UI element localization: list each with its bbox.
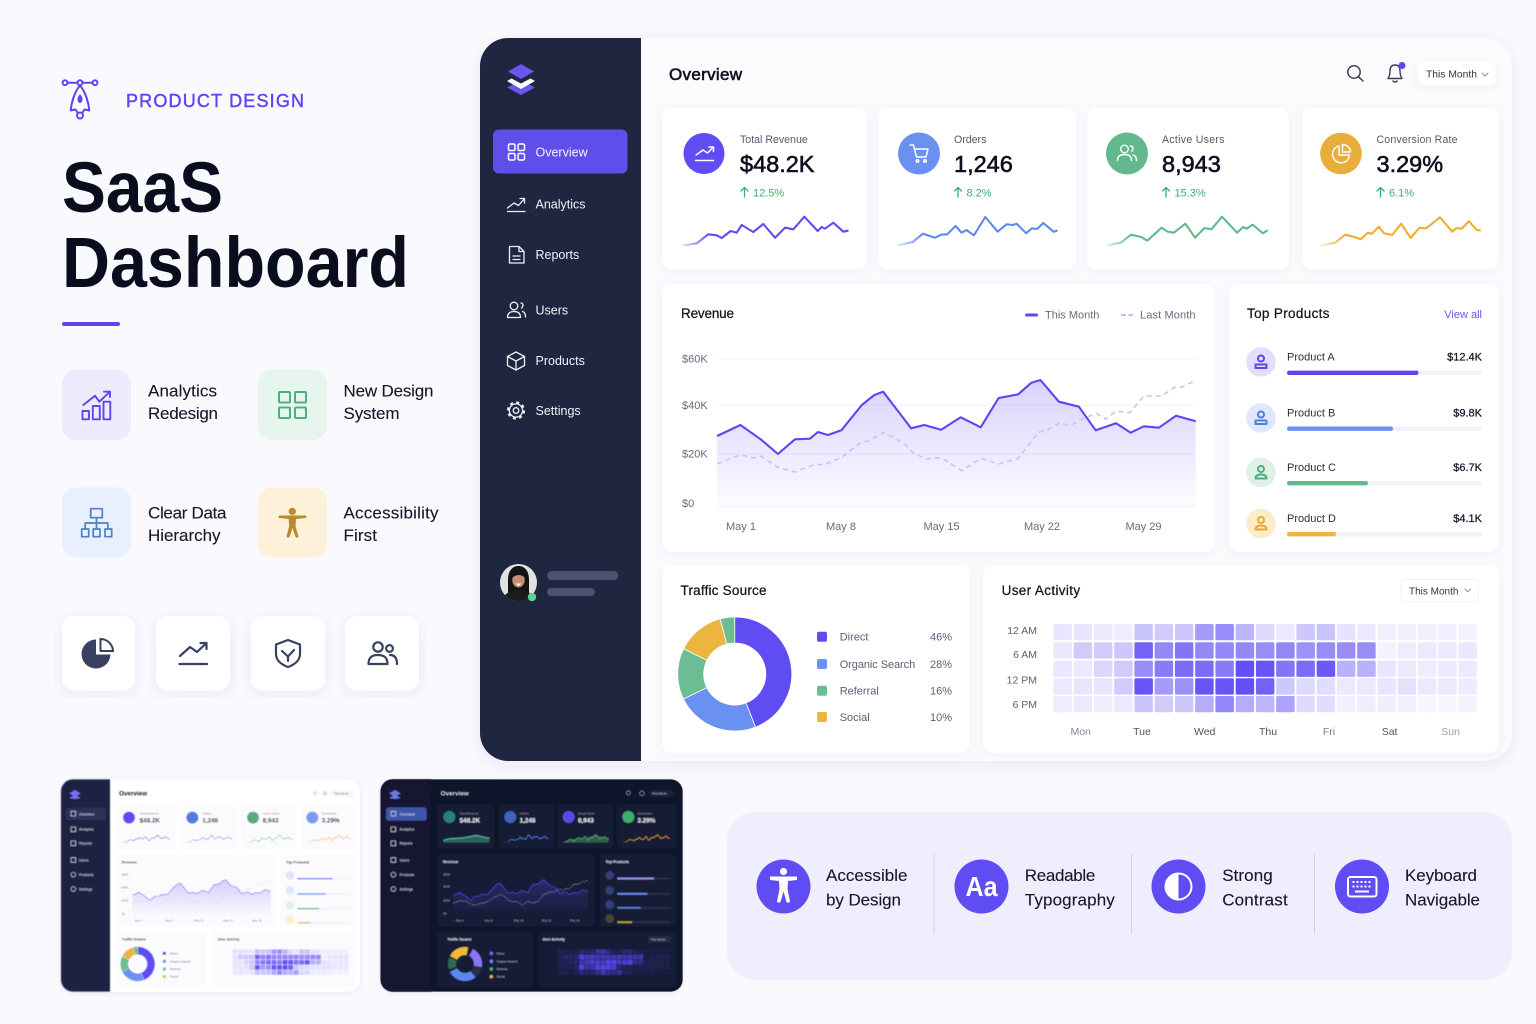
preview: dark theme dashboard: Top Products <box>606 860 629 864</box>
preview: dark theme dashboard: Organic Search <box>497 959 518 963</box>
x axis labels: May 29 <box>1125 521 1162 533</box>
preview: dark theme dashboard: $48.2K <box>460 818 481 825</box>
preview: dark theme dashboard: Products <box>400 873 414 877</box>
preview: dark theme dashboard: $20K <box>443 898 450 902</box>
preview: dark theme dashboard: Overview <box>441 790 469 797</box>
product b: $9.8K <box>1453 408 1483 420</box>
donut chart <box>678 617 792 731</box>
preview: dark theme dashboard: User Activity <box>543 937 566 941</box>
feature: readable typography <box>954 860 1115 914</box>
feature: new design system: New Design <box>344 382 434 400</box>
feature: clear data hierarchy: Hierarchy <box>148 526 221 545</box>
preview: dark theme dashboard: $0 <box>443 911 447 915</box>
panel: sidebar <box>480 38 641 761</box>
product a <box>1246 347 1483 377</box>
preview: light theme dashboard: Users <box>79 858 89 862</box>
feature: keyboard navigable <box>1335 860 1480 914</box>
preview: light theme dashboard: May 15 <box>194 918 204 922</box>
kpi card: total revenue: Total Revenue <box>740 134 808 146</box>
preview: light theme dashboard: $48.2K <box>140 818 161 825</box>
kpi card: orders: 1,246 <box>954 151 1013 177</box>
feature: strong contrast: Contrast <box>1222 890 1288 910</box>
day labels: Wed <box>1194 726 1216 738</box>
product b: Product B <box>1287 408 1335 420</box>
preview: light theme dashboard: Overview <box>79 812 95 816</box>
nav: settings <box>508 402 581 418</box>
user profile <box>500 564 618 602</box>
feature: strong contrast: Strong <box>1222 866 1273 885</box>
row labels: 6 PM <box>1012 699 1037 711</box>
feature: accessibility first <box>258 488 439 558</box>
day labels <box>1070 726 1460 738</box>
feature: accessible by design: by Design <box>826 890 901 910</box>
preview: dark theme dashboard: 1,246 <box>520 818 536 825</box>
legend: 10% <box>930 712 952 724</box>
preview: light theme dashboard: Orders <box>202 812 212 816</box>
y axis labels: $0 <box>682 498 694 510</box>
product d: $4.1K <box>1453 513 1483 525</box>
preview: light theme dashboard: Referral <box>170 967 181 971</box>
icon card: trend line <box>156 616 230 690</box>
legend <box>817 632 952 724</box>
header title: Overview <box>669 65 743 84</box>
feature: accessible by design <box>756 860 908 914</box>
kpi card: active users: Active Users <box>1162 134 1224 146</box>
preview: light theme dashboard: 8,943 <box>263 818 279 825</box>
nav: analytics <box>508 198 586 212</box>
preview: dark theme dashboard: Users <box>400 858 409 862</box>
main dashboard panel <box>480 38 1512 761</box>
preview: light theme dashboard: Traffic Source <box>122 937 146 941</box>
day labels: Thu <box>1259 726 1277 738</box>
preview: light theme dashboard: $60K <box>122 872 129 876</box>
sparkline <box>898 217 1057 245</box>
icon card: users <box>345 616 419 690</box>
preview: dark theme dashboard: Overview <box>400 812 415 816</box>
feature: keyboard navigable: Navigable <box>1405 890 1480 910</box>
panel: revenue chart <box>662 284 1215 552</box>
kpi card: orders: 8.2% <box>966 188 992 200</box>
preview: light theme dashboard: Revenue <box>122 860 137 864</box>
kpi card: conversion rate: Conversion Rate <box>1376 134 1458 146</box>
preview: dark theme dashboard: Social <box>497 975 505 979</box>
preview: light theme dashboard: $0 <box>122 912 125 916</box>
product c: Product C <box>1287 462 1336 474</box>
y axis labels: $20K <box>682 448 708 460</box>
preview: light theme dashboard: 3.29% <box>322 818 340 825</box>
product d: Product D <box>1287 513 1336 525</box>
preview: dark theme dashboard: $40K <box>443 885 450 889</box>
nav: users <box>508 302 568 318</box>
panel: revenue chart: Revenue <box>681 306 734 321</box>
preview: dark theme dashboard: May 29 <box>570 918 580 922</box>
nav: analytics: Analytics <box>536 198 586 212</box>
feature: accessible by design: Accessible <box>826 866 908 885</box>
panel: traffic source: Traffic Source <box>680 583 766 598</box>
product a: $12.4K <box>1447 352 1483 364</box>
kpi card: conversion rate: 6.1% <box>1389 188 1414 200</box>
preview: dark theme dashboard: Analytics <box>400 828 414 832</box>
nav: users: Users <box>536 304 568 318</box>
preview: light theme dashboard: $40K <box>122 885 129 889</box>
dropdown <box>1401 580 1478 602</box>
sparkline <box>1322 217 1480 245</box>
kpi card: conversion rate: 3.29% <box>1376 151 1443 177</box>
title: Dashboard <box>62 224 409 303</box>
preview: light theme dashboard: May 1 <box>135 918 143 922</box>
row labels: 12 AM <box>1007 625 1037 637</box>
y axis labels: $40K <box>682 400 708 412</box>
preview: light theme dashboard: Overview <box>119 790 147 797</box>
x axis labels: May 8 <box>826 521 856 533</box>
preview: light theme dashboard: This Month <box>334 792 349 796</box>
preview: light theme dashboard: May 22 <box>223 918 233 922</box>
preview: light theme dashboard: $20K <box>122 898 129 902</box>
panel: user activity: User Activity <box>1002 583 1080 598</box>
preview: light theme dashboard: May 29 <box>252 918 262 922</box>
preview: light theme dashboard: Products <box>79 873 94 877</box>
preview: dark theme dashboard: May 15 <box>514 918 524 922</box>
feature: clear data hierarchy <box>62 488 227 558</box>
preview: dark theme dashboard: $60K <box>443 872 450 876</box>
legend: Last Month <box>1140 310 1196 322</box>
product d <box>1246 509 1483 538</box>
preview: dark theme dashboard: Orders <box>520 812 529 816</box>
preview: dark theme dashboard: This Month <box>651 938 666 942</box>
legend <box>1025 310 1196 322</box>
brand header <box>63 80 304 118</box>
product b <box>1246 403 1483 433</box>
feature: strong contrast <box>1152 860 1288 914</box>
sparkline <box>684 217 848 245</box>
legend: Direct <box>840 632 868 644</box>
preview: light theme dashboard: Settings <box>79 887 92 891</box>
preview: light theme dashboard: Top Products <box>286 860 309 864</box>
kpi card: active users <box>1087 108 1289 270</box>
nav: overview active <box>493 130 628 174</box>
legend: 46% <box>930 632 952 644</box>
feature: new design system: System <box>344 404 400 423</box>
legend: 16% <box>930 686 952 698</box>
preview: light theme dashboard: Conversion <box>322 812 337 816</box>
x axis labels: May 22 <box>1024 521 1060 533</box>
dropdown: this month <box>1418 62 1496 85</box>
feature: readable typography: Readable <box>1025 866 1095 885</box>
y axis labels: $60K <box>682 354 708 366</box>
kpi card: orders <box>878 108 1076 270</box>
feature: readable typography: Aa <box>966 871 998 902</box>
icon card: shield check <box>251 616 325 690</box>
preview: dark theme dashboard: May 1 <box>456 918 464 922</box>
preview: dark theme dashboard: Settings <box>400 887 413 891</box>
sparkline <box>1107 217 1267 245</box>
product a: Product A <box>1287 352 1335 364</box>
day labels: Tue <box>1133 726 1151 738</box>
nav: products: Products <box>536 354 585 368</box>
feature: keyboard navigable: Keyboard <box>1405 866 1477 885</box>
preview: light theme dashboard: Direct <box>170 951 178 955</box>
feature: analytics redesign: Redesign <box>148 404 218 423</box>
preview: dark theme dashboard: Active Users <box>578 812 595 816</box>
dropdown: This Month <box>1409 586 1458 598</box>
feature: accessibility first: First <box>344 526 377 545</box>
product c <box>1246 458 1483 487</box>
preview: light theme dashboard: Reports <box>79 842 92 846</box>
feature: readable typography: Typography <box>1025 890 1115 910</box>
preview: dark theme dashboard: Conversion <box>637 812 653 816</box>
panel: top products: View all <box>1444 309 1482 321</box>
kpi card: conversion rate <box>1302 108 1499 270</box>
day labels: Sun <box>1441 726 1460 738</box>
feature: analytics redesign <box>62 370 218 440</box>
day labels: Sat <box>1382 726 1398 738</box>
preview: light theme dashboard: Active Users <box>263 812 280 816</box>
icon: notification bell <box>1388 62 1406 82</box>
nav: products <box>508 352 585 370</box>
preview: dark theme dashboard: Direct <box>497 951 505 955</box>
preview: light theme dashboard <box>61 779 360 992</box>
x axis labels: May 15 <box>923 521 960 533</box>
legend: Referral <box>840 686 879 698</box>
preview: dark theme dashboard: May 8 <box>485 918 493 922</box>
nav: reports <box>510 246 579 263</box>
preview: dark theme dashboard: 8,943 <box>578 818 594 825</box>
icon: pen tool rocket <box>63 80 97 118</box>
kpi card: active users: 8,943 <box>1162 151 1221 177</box>
preview: dark theme dashboard: May 22 <box>542 918 552 922</box>
preview: dark theme dashboard: This Month <box>652 792 667 796</box>
kpi card: active users: 15.3% <box>1174 188 1206 200</box>
panel: top products: Top Products <box>1247 306 1330 321</box>
preview: dark theme dashboard: 3.29% <box>637 818 656 825</box>
kpi card: total revenue: 12.5% <box>753 188 784 200</box>
day labels: Mon <box>1070 726 1091 738</box>
product c: $6.7K <box>1453 462 1483 474</box>
icon: layers logo <box>507 64 535 95</box>
dropdown: this month: This Month <box>1426 70 1477 80</box>
panel: top products <box>1229 284 1499 552</box>
kpi card: total revenue <box>662 108 867 270</box>
line chart <box>717 380 1196 507</box>
preview: dark theme dashboard: Referral <box>497 967 508 971</box>
preview: dark theme dashboard <box>381 779 683 992</box>
icon card: pie chart <box>62 616 135 690</box>
feature: accessibility first: Accessibility <box>344 504 439 522</box>
y axis labels <box>682 354 708 510</box>
x axis labels <box>726 521 1162 533</box>
panel: accessibility features <box>727 812 1512 980</box>
row labels: 6 AM <box>1013 649 1037 661</box>
nav: overview active: Overview <box>536 146 589 160</box>
nav: settings: Settings <box>536 404 581 418</box>
x axis labels: May 1 <box>726 521 756 533</box>
title: SaaS <box>62 149 223 228</box>
preview: dark theme dashboard: Revenue <box>443 860 458 864</box>
nav: reports: Reports <box>536 248 579 262</box>
preview: light theme dashboard: User Activity <box>217 937 241 941</box>
preview: light theme dashboard: Social <box>170 975 178 979</box>
row labels <box>1007 625 1037 711</box>
kpi card: total revenue: $48.2K <box>740 151 815 177</box>
preview: light theme dashboard: Analytics <box>79 828 94 832</box>
legend: This Month <box>1045 310 1099 322</box>
preview: dark theme dashboard: Traffic Source <box>447 937 472 941</box>
row labels: 12 PM <box>1007 674 1037 686</box>
title underline <box>62 322 120 326</box>
feature: new design system <box>258 370 434 440</box>
preview: dark theme dashboard: Reports <box>400 842 413 846</box>
legend: Organic Search <box>840 659 915 671</box>
feature: clear data hierarchy: Clear Data <box>148 504 227 522</box>
preview: dark theme dashboard: Total Revenue <box>460 812 479 816</box>
panel: traffic source <box>662 565 970 753</box>
title <box>62 149 409 303</box>
feature: analytics redesign: Analytics <box>148 382 217 400</box>
icon: search <box>1348 66 1363 81</box>
panel: user activity <box>983 565 1499 753</box>
legend: 28% <box>930 659 952 671</box>
preview: light theme dashboard: Organic Search <box>170 959 191 963</box>
preview: light theme dashboard: 1,246 <box>202 818 219 825</box>
kpi card: orders: Orders <box>954 134 986 146</box>
heatmap <box>1053 624 1477 712</box>
preview: light theme dashboard: Total Revenue <box>140 812 159 816</box>
legend: Social <box>840 712 870 724</box>
day labels: Fri <box>1323 726 1335 738</box>
preview: light theme dashboard: May 8 <box>165 918 173 922</box>
eyebrow label: PRODUCT DESIGN <box>126 91 304 111</box>
